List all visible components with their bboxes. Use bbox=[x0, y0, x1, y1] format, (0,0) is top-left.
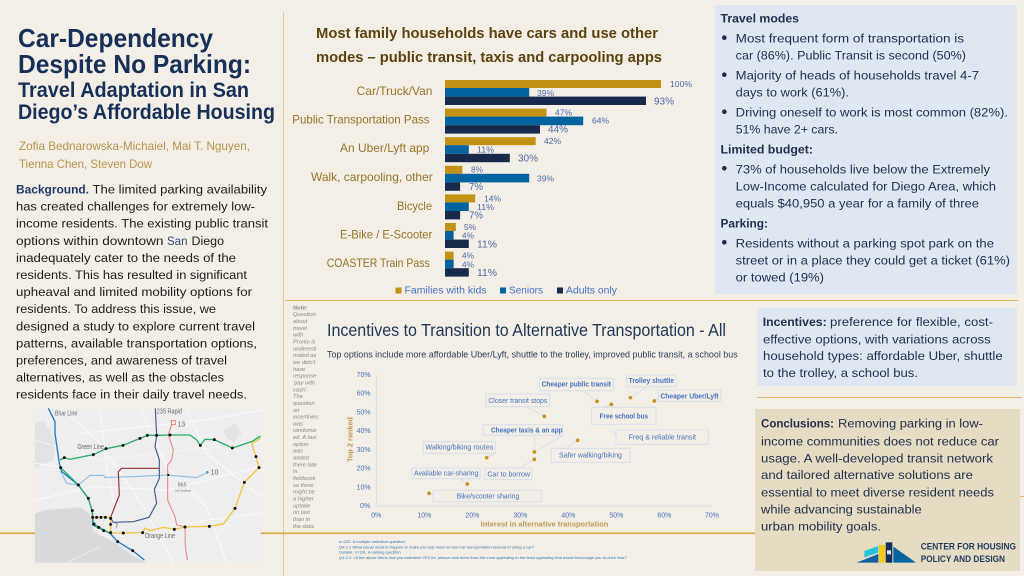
line: green bbox=[60, 435, 261, 533]
data points bbox=[427, 396, 656, 495]
data labels: Trolley shuttle bbox=[629, 377, 674, 385]
chart title: travel modes bbox=[316, 25, 662, 66]
data labels: Walking/biking routes bbox=[425, 444, 494, 452]
bars: seniors bbox=[445, 88, 583, 268]
bullets: limited budget: equals $40,950 a year for a family of three bbox=[736, 196, 979, 210]
note: survey caveat: was bbox=[293, 421, 303, 427]
map labels: 965 bbox=[178, 483, 187, 489]
data labels: Safer walking/biking bbox=[559, 452, 622, 460]
text block: background bbox=[16, 182, 269, 402]
logo text: CENTER FOR HOUSING bbox=[921, 542, 1016, 552]
value labels: 100% bbox=[670, 79, 692, 89]
bullets: limited budget: Low-Income calculated for Diego Area, which bbox=[736, 180, 996, 194]
data labels: Cheaper public transit bbox=[542, 381, 612, 389]
panel: incentives: effective options, with variations across bbox=[763, 332, 991, 346]
category labels: Bicycle bbox=[397, 200, 432, 213]
text block: background: Background. bbox=[16, 182, 89, 196]
note: survey caveat: might be bbox=[293, 490, 315, 496]
panel: conclusions: Removing parking in low- bbox=[838, 417, 983, 431]
bullets: travel modes: car (86%). Public Transit is second (50%) bbox=[736, 48, 966, 62]
value labels: 47% bbox=[555, 108, 572, 118]
bullets: travel modes: 51% have 2+ cars. bbox=[736, 122, 838, 136]
note: survey caveat: ed. A taxi bbox=[293, 435, 317, 441]
line: orange bbox=[93, 438, 261, 533]
data labels: Cheaper Uber/Lyft bbox=[660, 392, 719, 400]
bullets: parking: or towed (19%) bbox=[736, 270, 824, 284]
data labels: Car to borrow bbox=[487, 470, 531, 478]
footnote: survey questions bbox=[339, 539, 627, 560]
value labels: 4% bbox=[462, 251, 474, 261]
y-axis title: Top 2 ranked bbox=[348, 417, 355, 462]
legend: Seniors bbox=[509, 286, 543, 296]
transit stops bbox=[59, 433, 260, 552]
logo text bbox=[921, 542, 1016, 564]
note: survey caveat: Pronto is bbox=[293, 339, 316, 345]
x-axis tick labels: 70% bbox=[705, 513, 719, 520]
note: survey caveat: randomiz bbox=[293, 428, 317, 434]
category labels: An Uber/Lyft app bbox=[340, 142, 429, 155]
logo text: POLICY AND DESIGN bbox=[921, 554, 1005, 564]
bullets: travel modes: days to work (61%). bbox=[736, 86, 849, 100]
bullets: travel modes: Most frequent form of transportation is bbox=[736, 32, 964, 46]
y-axis tick labels: 0% bbox=[360, 503, 370, 510]
logo: center for housing policy and design bbox=[857, 542, 1016, 564]
note: survey caveat: with bbox=[293, 333, 303, 339]
y-axis tick labels: 10% bbox=[357, 484, 371, 491]
bullets: limited budget: 73% of households live below the Extremely bbox=[736, 162, 991, 176]
map labels: 13 bbox=[177, 421, 185, 428]
note: survey caveat: Question bbox=[293, 312, 316, 318]
panel: conclusions: and tailored alternative solutions are bbox=[761, 468, 973, 482]
note: survey caveat: the data. bbox=[293, 524, 315, 530]
map labels: (no Sunday) bbox=[175, 488, 191, 492]
chart title: travel modes: Most family households have cars and use other bbox=[316, 25, 658, 42]
x-axis tick labels: 50% bbox=[609, 513, 623, 520]
y-axis tick labels: 70% bbox=[357, 372, 371, 379]
line: 235 rapid bbox=[111, 408, 159, 522]
footnote: survey questions: Q4.2.1 What would need to happen to make you rely more on non-car transportation instead of using a car? bbox=[339, 544, 535, 549]
text block: background: patterns, available transportation options, bbox=[16, 336, 257, 350]
note: survey caveat: about bbox=[293, 319, 308, 325]
value labels: 44% bbox=[548, 125, 568, 136]
note: survey caveat: in bbox=[293, 469, 297, 475]
value labels: 11% bbox=[477, 239, 497, 250]
panel: incentives bbox=[757, 308, 1017, 386]
x-axis tick labels: 10% bbox=[417, 513, 431, 520]
value labels: 4% bbox=[462, 231, 474, 241]
note: survey caveat: cash’. bbox=[293, 387, 308, 393]
panel: incentives: to the trolley, a school bus. bbox=[763, 366, 918, 380]
bullets: parking: Residents without a parking spot park on the bbox=[736, 236, 994, 250]
category labels: Walk, carpooling, other bbox=[311, 171, 433, 184]
bullets: parking bbox=[722, 236, 1010, 284]
value labels: 30% bbox=[518, 153, 538, 164]
x-axis tick labels: 40% bbox=[561, 513, 575, 520]
chart title: incentives: Incentives to Transition to Alternative Transportation - All bbox=[327, 320, 726, 340]
footnote: survey questions: Sample: n=131. A ranking question. bbox=[339, 550, 402, 555]
note: survey caveat: there late bbox=[293, 462, 317, 468]
chart subtitle: Top options include more affordable Uber/Lyft, shuttle to the trolley, improved public transit, a school bus bbox=[327, 350, 738, 360]
map labels: 7 bbox=[114, 524, 118, 531]
panel: conclusions: urban mobility goals. bbox=[761, 520, 881, 534]
panel: conclusions: while advancing sustainable bbox=[760, 503, 922, 517]
heading: parking: Parking: bbox=[720, 216, 768, 230]
authors: Zofia Bednarowska-Michaiel, Mai T. Nguyen, bbox=[19, 139, 250, 153]
x-axis tick labels: 0% bbox=[371, 513, 381, 520]
note: survey caveat: on taxi bbox=[293, 510, 310, 516]
x-axis tick labels: 30% bbox=[513, 513, 527, 520]
category labels bbox=[292, 85, 433, 270]
value labels: 11% bbox=[477, 202, 494, 212]
text block: background: residents. To address this issue, we bbox=[16, 302, 216, 316]
note: survey caveat: travel bbox=[293, 326, 308, 332]
note: survey caveat: Note: bbox=[293, 305, 308, 311]
note: survey caveat: have bbox=[293, 367, 305, 373]
line: 10 route bbox=[61, 472, 207, 485]
text block: background: inadequately cater to the needs of the bbox=[16, 251, 236, 265]
category labels: E-Bike / E-Scooter bbox=[340, 228, 432, 242]
note: survey caveat: The bbox=[293, 394, 303, 400]
scatter chart: incentives bbox=[348, 372, 721, 528]
map labels: 10 bbox=[211, 470, 219, 477]
value labels: 8% bbox=[471, 165, 483, 175]
map labels: Orange Line bbox=[145, 533, 175, 540]
value labels: 11% bbox=[477, 268, 497, 279]
value labels: 4% bbox=[462, 259, 474, 269]
legend bbox=[396, 286, 617, 296]
note: survey caveat: response bbox=[293, 374, 316, 380]
data labels: Free school bus bbox=[600, 413, 648, 421]
value labels bbox=[462, 79, 692, 279]
x-axis tick labels: 60% bbox=[657, 513, 671, 520]
panel: conclusions: income communities does not reduce car bbox=[761, 434, 999, 448]
panel: travel modes, budget and parking bbox=[715, 5, 1017, 294]
bullets: travel modes: Driving oneself to work is most common (82%). bbox=[736, 106, 1008, 120]
text block: background: income residents. The existing public transit bbox=[16, 217, 269, 231]
authors: Tienna Chen, Steven Dow bbox=[19, 157, 152, 171]
x-axis tick labels bbox=[371, 513, 719, 520]
note: survey caveat: on bbox=[293, 408, 299, 414]
heading: limited budget: Limited budget: bbox=[720, 142, 813, 156]
category labels: Car/Truck/Van bbox=[357, 85, 432, 98]
map labels: Green Line bbox=[77, 444, 104, 451]
title: Despite No Parking: bbox=[18, 49, 251, 79]
text block: background: alternatives, as well as the obstacles bbox=[16, 371, 224, 385]
note: survey caveat: added bbox=[293, 456, 310, 462]
text block: background: residents face in their daily travel needs. bbox=[16, 388, 247, 402]
value labels: 64% bbox=[592, 116, 609, 126]
line: red bbox=[111, 468, 159, 517]
axes bbox=[376, 375, 712, 506]
note: survey caveat bbox=[293, 305, 318, 530]
note: survey caveat: option bbox=[293, 442, 308, 448]
y-axis tick labels: 30% bbox=[357, 447, 371, 454]
data labels: Bike/scooter sharing bbox=[457, 493, 519, 501]
title: Diego’s Affordable Housing bbox=[18, 101, 275, 124]
text block: background: preferences, and awareness of travel bbox=[16, 354, 227, 368]
note: survey caveat: fieldwork bbox=[293, 476, 317, 482]
bars: adults only bbox=[445, 97, 646, 277]
text block: background: Diego bbox=[192, 234, 224, 248]
value labels: 93% bbox=[654, 96, 674, 108]
line: 13 route bbox=[168, 421, 187, 560]
text block: background: residents. This has resulted in significant bbox=[16, 268, 248, 282]
panel: conclusions: essential to meet diverse resident needs bbox=[761, 486, 994, 500]
line: blue bbox=[48, 408, 144, 560]
transit map bbox=[35, 408, 261, 563]
bullets: travel modes bbox=[722, 32, 1008, 136]
label leader lines bbox=[429, 387, 658, 495]
footnote: survey questions: Q4.2.2. Of the above items that you indicated YES for, please rank them from the most appealing to the least appealing that would encourage you to drive less? bbox=[339, 555, 627, 560]
bullets: parking: street or in a place they could get a ticket (61%) bbox=[736, 253, 1010, 267]
panel: conclusions: Conclusions: bbox=[761, 417, 834, 431]
note: survey caveat: mated as bbox=[293, 353, 317, 359]
category labels: Public Transportation Pass bbox=[292, 114, 430, 126]
bars: families with kids bbox=[445, 80, 661, 260]
title: Car-Dependency bbox=[18, 23, 214, 53]
note: survey caveat: underesti bbox=[293, 346, 317, 352]
note: survey caveat: was bbox=[293, 449, 303, 455]
x-axis tick labels: 20% bbox=[465, 513, 479, 520]
chart title: travel modes: modes – public transit, taxis and carpooling apps bbox=[316, 49, 662, 66]
y-axis tick labels: 50% bbox=[357, 410, 371, 417]
title: Travel Adaptation in San bbox=[18, 79, 249, 102]
value labels: 39% bbox=[537, 88, 554, 98]
bullets: travel modes: Majority of heads of households travel 4-7 bbox=[736, 69, 979, 83]
text block: background: designed a study to explore current travel bbox=[16, 319, 255, 333]
y-axis tick labels: 20% bbox=[357, 466, 371, 473]
text block: background: upheaval and limited mobility options for bbox=[16, 285, 252, 299]
category labels: COASTER Train Pass bbox=[327, 257, 430, 270]
bar chart: transportation by household type bbox=[292, 79, 692, 296]
data labels: Available car-sharing bbox=[414, 470, 478, 478]
footnote: survey questions: n=132. A multiple selection question. bbox=[339, 539, 406, 544]
value labels: 7% bbox=[469, 211, 483, 222]
authors bbox=[19, 139, 250, 171]
panel: conclusions bbox=[755, 409, 1020, 571]
value labels: 42% bbox=[544, 136, 561, 146]
panel: incentives: preference for flexible, cost- bbox=[830, 315, 993, 329]
panel: conclusions: usage. A well-developed transit network bbox=[761, 451, 994, 465]
text block: background: has created challenges for extremely low- bbox=[16, 200, 255, 214]
value labels: 14% bbox=[484, 193, 501, 203]
data labels bbox=[412, 375, 721, 502]
legend: Families with kids bbox=[404, 286, 487, 296]
panel: incentives: household types: affordable Uber, shuttle bbox=[763, 349, 1003, 363]
text block: background: San bbox=[167, 234, 188, 248]
y-axis tick labels: 40% bbox=[357, 428, 371, 435]
value labels: 5% bbox=[464, 222, 476, 232]
data labels: Cheaper taxis & an app bbox=[491, 426, 563, 434]
map labels bbox=[55, 409, 219, 540]
value labels: 7% bbox=[469, 182, 483, 193]
data labels: Closer transit stops bbox=[488, 397, 548, 405]
bullets: limited budget bbox=[722, 162, 996, 210]
map labels: 235 Rapid bbox=[157, 409, 182, 416]
y-axis tick labels: 60% bbox=[357, 391, 371, 398]
data labels: Freq & reliable transit bbox=[629, 434, 696, 442]
heading: travel modes: Travel modes bbox=[720, 12, 799, 26]
note: survey caveat: uptake bbox=[293, 503, 310, 509]
text block: background: options within downtown bbox=[16, 234, 164, 248]
note: survey caveat: we didn’t bbox=[293, 360, 316, 366]
title bbox=[18, 23, 275, 124]
note: survey caveat: ‘pay with bbox=[293, 380, 315, 386]
value labels: 39% bbox=[537, 173, 554, 183]
map labels: Blue Line bbox=[55, 410, 77, 417]
icon: buildings bbox=[857, 542, 916, 563]
value labels: 11% bbox=[477, 145, 494, 155]
x-axis title: Interest in alternative transportation bbox=[481, 521, 608, 528]
note: survey caveat: incentives bbox=[293, 415, 318, 421]
note: survey caveat: a higher bbox=[293, 497, 315, 503]
y-axis tick labels bbox=[357, 372, 371, 510]
note: survey caveat: than in bbox=[293, 517, 310, 523]
text block: background: The limited parking availability bbox=[92, 182, 268, 196]
note: survey caveat: question bbox=[293, 401, 315, 407]
panel: incentives: Incentives: bbox=[763, 315, 827, 329]
legend: Adults only bbox=[566, 286, 617, 296]
note: survey caveat: so there bbox=[293, 483, 314, 489]
